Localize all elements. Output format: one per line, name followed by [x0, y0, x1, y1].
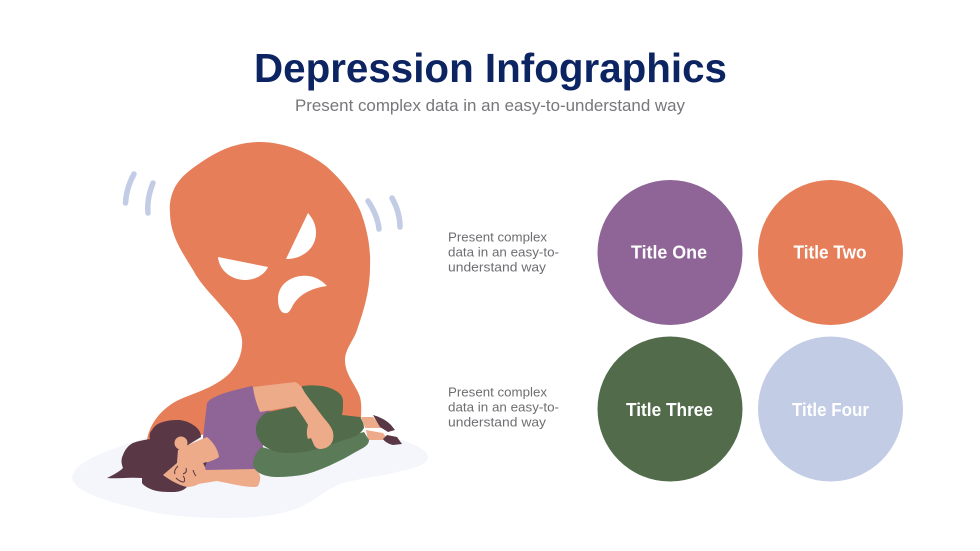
- circle: Title Three: [598, 336, 742, 482]
- monster right eye: [286, 213, 316, 259]
- motion marks: [126, 174, 400, 229]
- feet: [361, 417, 388, 440]
- circle: Title One: Title One: [631, 242, 707, 262]
- monster body: [147, 142, 370, 440]
- text block one: understand way: [448, 260, 547, 274]
- shoes: [373, 415, 402, 445]
- shirt: [203, 386, 270, 471]
- text block one: Present complex: [448, 230, 548, 244]
- lower leg: [253, 432, 369, 477]
- circle: Title One: [598, 180, 742, 325]
- neck shadow: [203, 462, 207, 467]
- ear: [174, 436, 188, 450]
- monster left eye: [218, 257, 268, 280]
- lower arm: [198, 469, 260, 487]
- facial creases: [175, 466, 196, 482]
- illustration: person curled up under a looming monster: [72, 142, 428, 518]
- monster mouth: [278, 276, 327, 313]
- hair: [107, 420, 201, 492]
- upper arm and hand: [253, 382, 333, 449]
- circle: Title Three: Title Three: [626, 400, 713, 420]
- person: [107, 382, 402, 492]
- text block two: understand way: [448, 414, 547, 430]
- neck and face: [163, 437, 219, 487]
- title: Depression Infographics: [254, 45, 727, 91]
- circle: Title Two: [758, 180, 903, 325]
- text block two: Present complex: [448, 384, 548, 400]
- floor shadow: [72, 437, 428, 518]
- text block two: data in an easy-to-: [448, 400, 559, 414]
- circle: Title Four: [758, 336, 903, 482]
- text block one: data in an easy-to-: [448, 244, 559, 260]
- upper leg: [256, 385, 364, 453]
- circle: Title Four: Title Four: [792, 400, 869, 420]
- subtitle: Present complex data in an easy-to-understand way: [295, 96, 685, 115]
- circle: Title Two: Title Two: [794, 242, 866, 262]
